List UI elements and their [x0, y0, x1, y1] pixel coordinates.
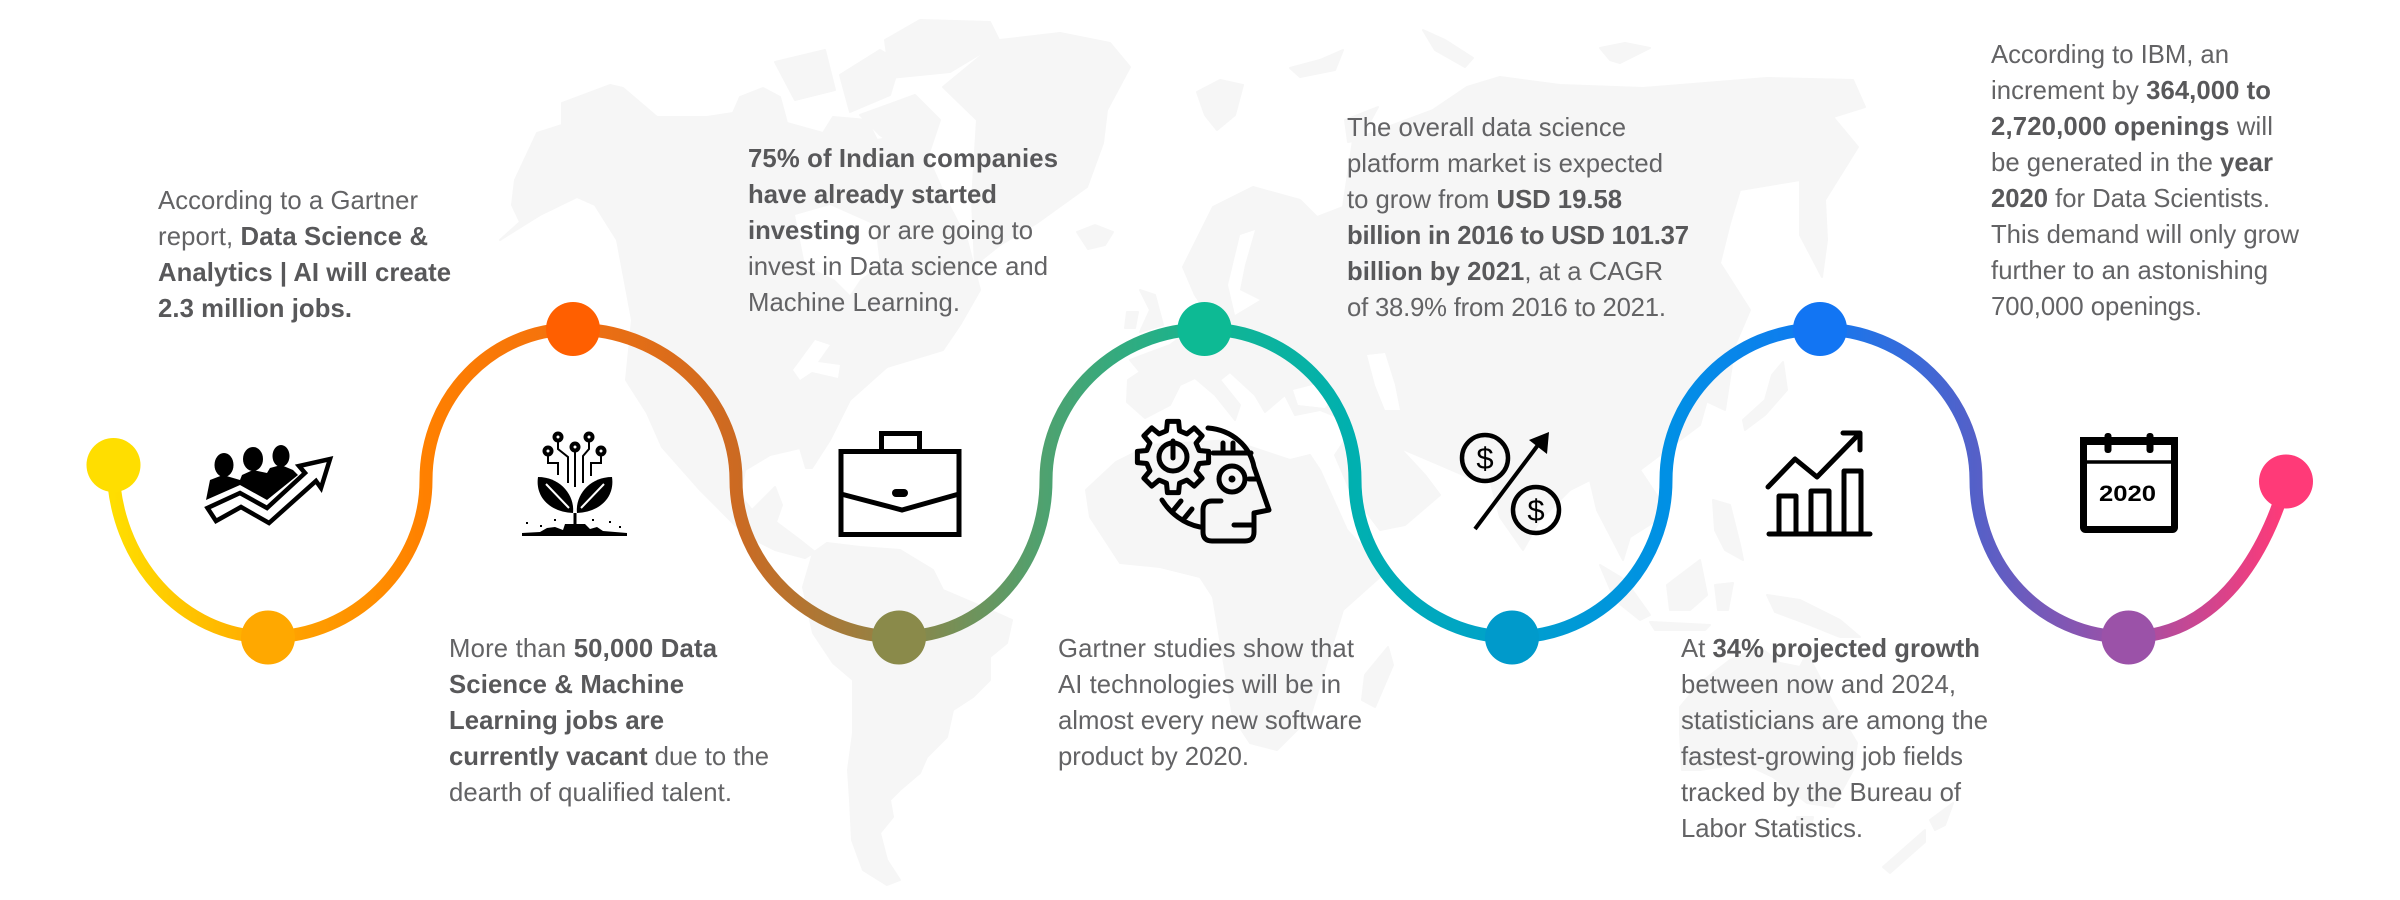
Arctic islands: [775, 20, 1000, 165]
icon: circuit plant: [522, 434, 627, 536]
node 1: [86, 438, 140, 492]
Japan: [1743, 362, 1787, 430]
New Zealand: [1883, 803, 1953, 873]
timeline nodes: [86, 302, 2313, 664]
British Isles: [1125, 290, 1163, 332]
North America: [500, 85, 980, 558]
text: IBM openings: According to IBM, an: [1991, 41, 2229, 69]
Iceland: [1077, 225, 1113, 249]
Hudson Bay: [795, 205, 880, 295]
Great Lakes: [793, 340, 840, 380]
Eurasia: [1127, 77, 1865, 560]
icon: bar chart with arrow: [1768, 433, 1870, 534]
text: 34% projected growth: between now and 2024,: [1681, 671, 1956, 699]
icon: people with rising arrow: [206, 445, 330, 523]
text: IBM openings: increment by 364,000 to: [1991, 77, 2271, 105]
text: IBM openings: [1991, 41, 2299, 321]
Sumatra: [1600, 565, 1650, 620]
text: Gartner AI technologies: product by 2020.: [1058, 743, 1249, 771]
map seas: [793, 205, 1780, 500]
text: 50,000 vacant jobs: currently vacant due to the: [449, 743, 769, 771]
icon: briefcase: [841, 434, 959, 534]
text: platform market growth: of 38.9% from 2016 to 2021.: [1347, 294, 1666, 322]
text: IBM openings: 2020 for Data Scientists.: [1991, 185, 2270, 213]
text: 50,000 vacant jobs: Science & Machine: [449, 671, 684, 699]
Caspian Sea: [1367, 353, 1400, 410]
node 5: [1178, 302, 1232, 356]
Red Sea: [1316, 457, 1345, 500]
Black Sea: [1293, 383, 1335, 408]
South America: [803, 543, 1012, 885]
node 4: [872, 610, 926, 664]
text: 34% projected growth: fastest-growing job fields: [1681, 743, 1963, 771]
icon: dollar percent arrow: $: [1476, 441, 1494, 476]
New Guinea: [1767, 595, 1860, 637]
text: IBM openings: be generated in the year: [1991, 149, 2273, 177]
icon: dollar percent arrow: $: [1527, 493, 1545, 528]
gradient timeline curve: [113, 329, 2286, 637]
northern islands: [1290, 30, 1650, 142]
text: Gartner 2.3 million jobs: Analytics | AI will create: [158, 259, 451, 287]
node 9: [2259, 454, 2313, 508]
text: IBM openings: 2,720,000 openings will: [1991, 113, 2273, 141]
text: platform market growth: billion in 2016 to USD 101.37: [1347, 222, 1689, 250]
background world map: [500, 20, 1953, 885]
text: Gartner 2.3 million jobs: [158, 187, 451, 323]
icon: dollar percent arrow: [1462, 432, 1559, 533]
text: platform market growth: to grow from USD 19.58: [1347, 186, 1622, 214]
text: 34% projected growth: [1681, 635, 1988, 843]
Tasmania: [1797, 817, 1813, 833]
text: 75% of Indian companies: investing or are going to: [748, 217, 1033, 245]
text: 50,000 vacant jobs: More than 50,000 Data: [449, 635, 718, 663]
text: Gartner AI technologies: AI technologies will be in: [1058, 671, 1341, 699]
Madagascar: [1362, 647, 1393, 707]
icon: AI head with gear: [1137, 421, 1269, 541]
Australia: [1680, 647, 1857, 807]
text: 75% of Indian companies: have already started: [748, 181, 997, 209]
text: IBM openings: This demand will only grow: [1991, 221, 2299, 249]
text: 34% projected growth: tracked by the Bureau of: [1681, 779, 1962, 807]
node 6: [1485, 610, 1539, 664]
text: 75% of Indian companies: [748, 145, 1058, 317]
node 7: [1793, 302, 1847, 356]
Tatar Strait: [1750, 267, 1780, 318]
text: platform market growth: billion by 2021, at a CAGR: [1347, 258, 1663, 286]
text: 34% projected growth: At 34% projected growth: [1681, 635, 1980, 663]
Africa: [1086, 440, 1387, 750]
text: 50,000 vacant jobs: dearth of qualified talent.: [449, 779, 732, 807]
text: 75% of Indian companies: 75% of Indian companies: [748, 145, 1058, 173]
text: 50,000 vacant jobs: Learning jobs are: [449, 707, 664, 735]
node 2: [241, 610, 295, 664]
icon: calendar 2020: [2080, 433, 2178, 530]
text: 34% projected growth: Labor Statistics.: [1681, 815, 1863, 843]
Greenland: [943, 33, 1130, 265]
Philippines and islands: [1713, 500, 1743, 560]
text: Gartner 2.3 million jobs: 2.3 million jobs.: [158, 295, 352, 323]
text: Gartner AI technologies: [1058, 635, 1362, 771]
text: Gartner AI technologies: almost every new software: [1058, 707, 1362, 735]
Borneo: [1667, 560, 1707, 610]
text: IBM openings: further to an astonishing: [1991, 257, 2268, 285]
text: Gartner 2.3 million jobs: report, Data Science &: [158, 223, 428, 251]
text: IBM openings: 700,000 openings.: [1991, 293, 2202, 321]
text: platform market growth: The overall data science: [1347, 114, 1626, 142]
text: platform market growth: [1347, 114, 1689, 322]
text: 34% projected growth: statisticians are among the: [1681, 707, 1988, 735]
text: 75% of Indian companies: Machine Learning.: [748, 289, 960, 317]
text: platform market growth: platform market is expected: [1347, 150, 1663, 178]
text: Gartner AI technologies: Gartner studies show that: [1058, 635, 1354, 663]
text: 50,000 vacant jobs: [449, 635, 769, 807]
Sulawesi and Java: [1650, 583, 1733, 630]
icon: calendar 2020: 2020: [2099, 481, 2156, 506]
text: 75% of Indian companies: invest in Data science and: [748, 253, 1048, 281]
Baltic Sea: [1228, 230, 1260, 315]
node 8: [2102, 610, 2156, 664]
node 3: [546, 302, 600, 356]
Svalbard: [1197, 80, 1243, 130]
text: Gartner 2.3 million jobs: According to a Gartner: [158, 187, 418, 215]
